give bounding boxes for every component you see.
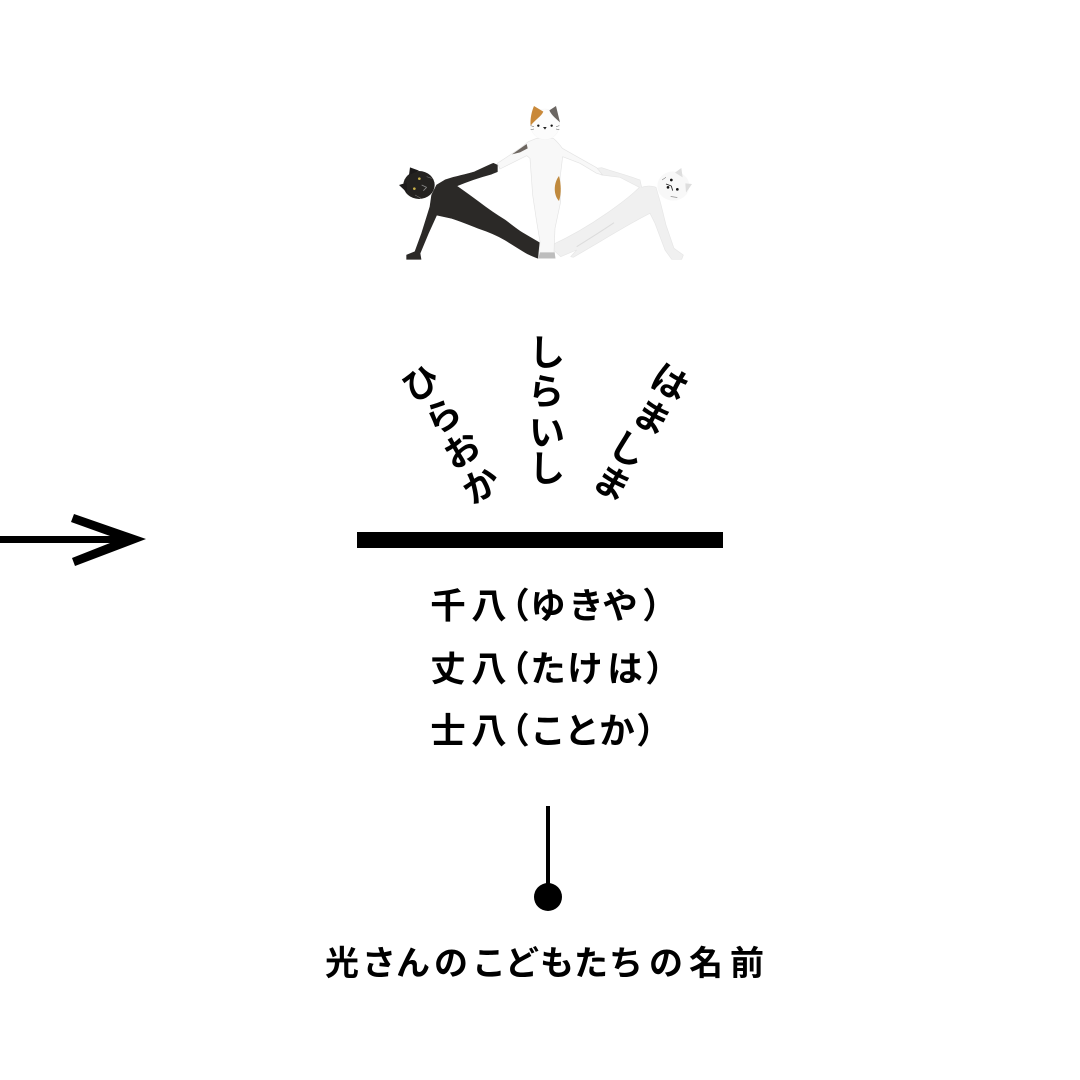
vertical name: はましま: ま — [626, 391, 678, 444]
name: 士八（ことか）: 士八（ことか） — [430, 711, 672, 751]
vertical name: しらいし — [528, 332, 565, 489]
vertical name: ひらおか: か — [455, 459, 507, 512]
arrow — [0, 514, 146, 566]
name: 千八（ゆきや）: 千八（ゆきや） — [430, 586, 678, 626]
vertical name: はましま: ま — [586, 457, 638, 510]
cat: calico, centre — [497, 106, 603, 258]
vertical name: はましま: し — [602, 423, 654, 476]
vertical name: ひらおか: お — [436, 424, 488, 477]
name: 丈八（たけは）: 丈八（たけは） — [430, 649, 681, 689]
heavy horizontal bar — [357, 532, 723, 548]
vertical name: しらいし: い — [529, 412, 565, 453]
vertical name: はましま — [586, 356, 696, 510]
cat: black, left — [399, 163, 542, 259]
vertical name: しらいし: し — [529, 448, 565, 489]
vertical name: ひらおか: ひ — [395, 357, 447, 410]
pin connector — [534, 806, 562, 911]
vertical name: しらいし: ら — [528, 371, 564, 412]
vertical name: ひらおか: ら — [417, 390, 469, 443]
illustration: three cat figures holding hands — [399, 106, 692, 259]
vertical name: ひらおか — [395, 357, 507, 512]
vertical name: はましま: は — [644, 356, 696, 409]
cat: white, right — [552, 168, 692, 259]
caption: 光さんのこどもたちの名前 — [325, 945, 764, 983]
list of names — [430, 586, 681, 751]
vertical name: しらいし: し — [529, 332, 565, 373]
